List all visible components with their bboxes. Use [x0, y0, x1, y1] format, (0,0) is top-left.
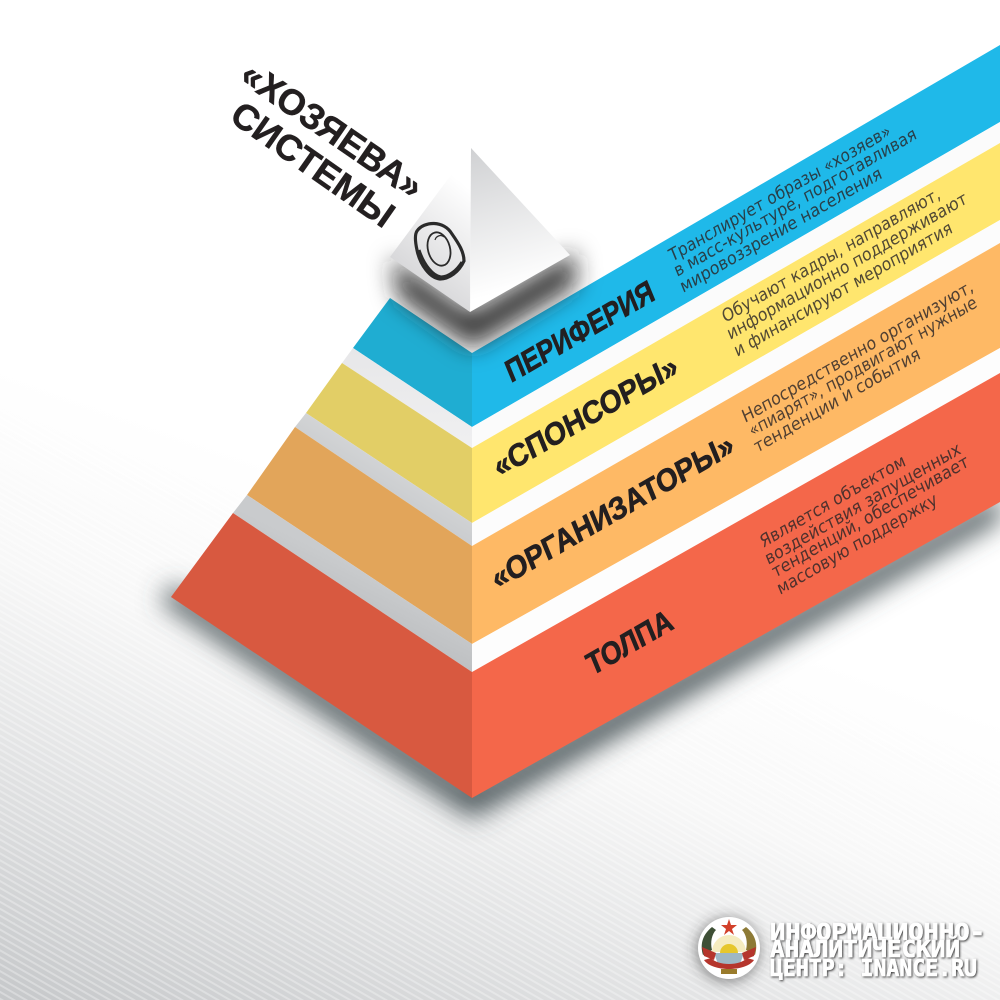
text: crowd description: воздействия запущенных [762, 439, 964, 570]
title: СИСТЕМЫ [223, 93, 403, 236]
text: crowd description: тенденций, обеспечивает [769, 452, 972, 583]
tier: sponsors [306, 143, 1000, 523]
logo text: АНАЛИТИЧЕСКИЙ [770, 935, 960, 963]
tier: crowd [171, 373, 1000, 798]
gap band 2 [295, 220, 1000, 546]
text: periphery description: в масс-культуре, подготавливая [671, 124, 920, 282]
tier: organizers [247, 243, 1000, 644]
logo text: ИНФОРМАЦИОННО- [770, 920, 985, 946]
gap band 3 [233, 348, 1000, 672]
text: sponsors description: Обучают кадры, направляют, [719, 184, 943, 328]
icon: eye [416, 223, 464, 279]
label: periphery: ПЕРИФЕРИЯ [500, 273, 659, 389]
text: sponsors description: и финансируют мероприятия [731, 218, 955, 362]
gap band 1 [342, 122, 1000, 448]
capstone shadow [392, 252, 576, 348]
text: sponsors description: информационно поддерживают [724, 189, 970, 345]
text: periphery description: Транслирует образы «хозяев» [665, 121, 894, 267]
label: sponsors: «СПОНСОРЫ» [488, 348, 683, 484]
text: organizers description: тенденции и события [751, 344, 923, 458]
text: organizers description: Непосредственно организуют, [739, 277, 976, 428]
label: organizers: «ОРГАНИЗАТОРЫ» [486, 426, 739, 596]
text: periphery description: мировоззрение населения [677, 164, 885, 298]
tier: periphery [353, 45, 1000, 427]
text: organizers description: «пиарят», продвигают нужные [746, 293, 980, 442]
text: crowd description: Является объектом [757, 451, 909, 553]
logo text: ЦЕНТР: INANCE.RU [770, 956, 977, 982]
label: crowd: ТОЛПА [581, 602, 678, 682]
pyramid shadow [160, 495, 1000, 818]
title: «ХОЗЯЕВА» [233, 53, 431, 207]
capstone pyramid [390, 148, 570, 312]
logo text [770, 920, 985, 982]
text: crowd description: массовую поддержку [774, 490, 940, 600]
icon: emblem [696, 917, 760, 982]
